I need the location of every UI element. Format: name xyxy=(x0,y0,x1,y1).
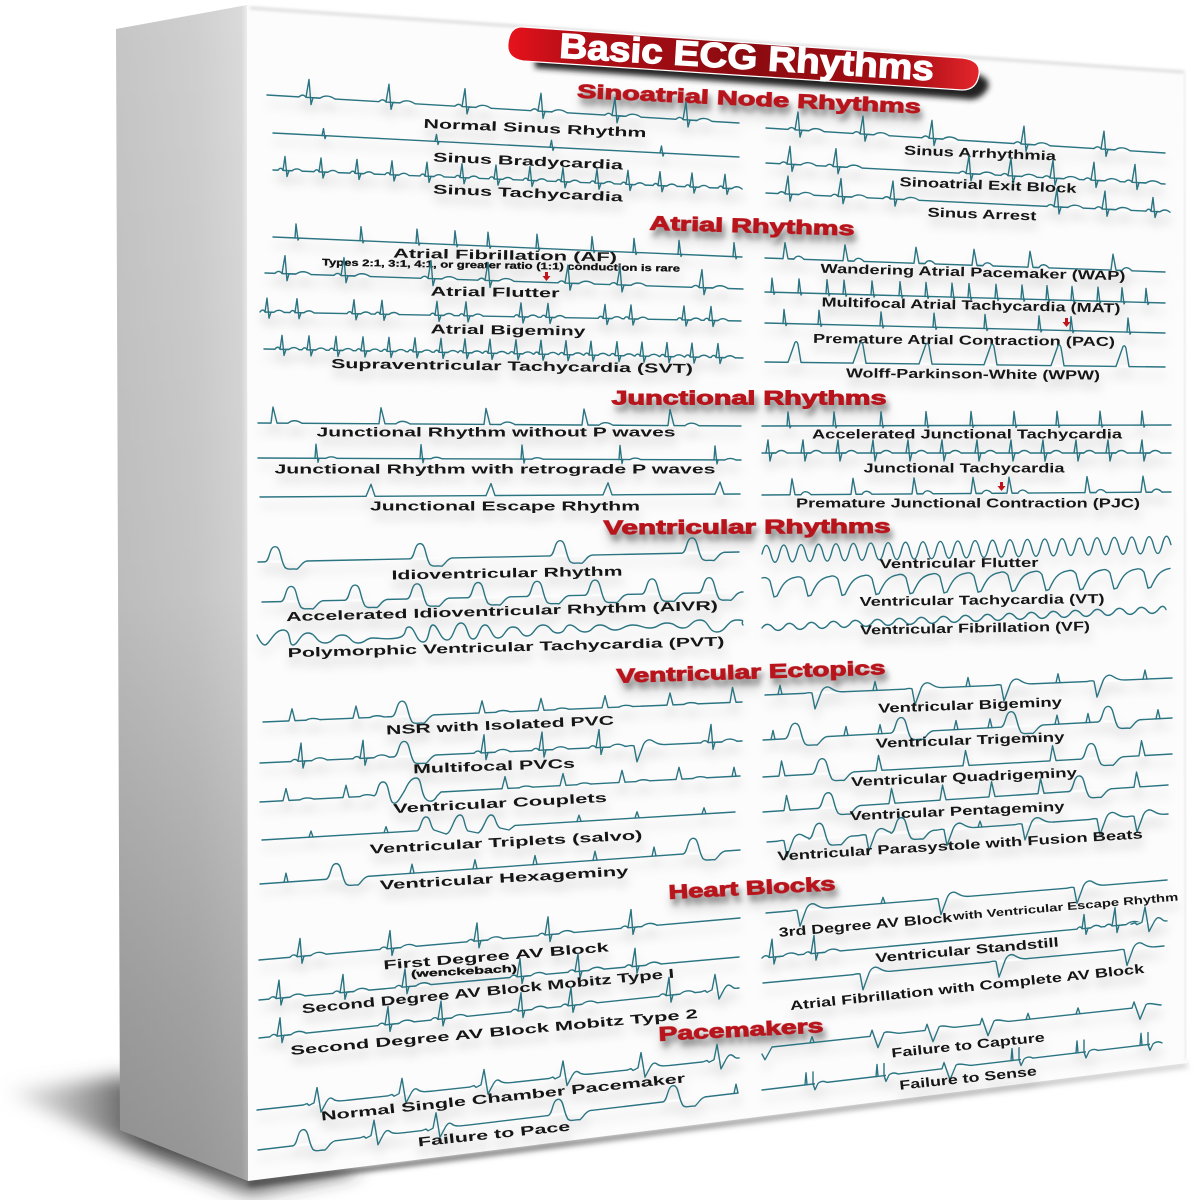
bottom edge shadow xyxy=(248,1065,1187,1184)
trace: junctional rhythm with retrograde p waves xyxy=(258,444,741,464)
front face xyxy=(247,5,1187,1181)
trace: ventricular parasystole xyxy=(767,799,1168,858)
trace: sinoatrial exit block xyxy=(766,145,1165,191)
label: second degree mobitz type 2: Second Degree AV Block Mobitz Type 2 xyxy=(290,1006,698,1058)
label: failure to sense: Failure to Sense xyxy=(899,1063,1037,1093)
label: failure to capture: Failure to Capture xyxy=(891,1029,1045,1061)
trace: idioventricular rhythm xyxy=(258,537,739,570)
label: ventricular quadrigeminy: Ventricular Quadrigeminy xyxy=(851,765,1078,789)
heading: ventricular ectopics: Ventricular Ectopics xyxy=(616,658,886,688)
heading: atrial rhythms: Atrial Rhythms xyxy=(649,214,855,240)
label: sinoatrial exit block: Sinoatrial Exit Block xyxy=(899,174,1078,196)
label: premature atrial contraction: Premature Atrial Contraction (PAC) xyxy=(813,331,1115,349)
front right edge shading xyxy=(1184,72,1186,1060)
label: wandering atrial pacemaker: Wandering Atrial Pacemaker (WAP) xyxy=(820,261,1126,283)
arrow: atrial flutter marker xyxy=(542,272,550,281)
label: junctional tachycardia: Junctional Tachycardia xyxy=(864,460,1066,476)
label: ventricular bigeminy: Ventricular Bigeminy xyxy=(878,694,1063,716)
label: ventricular fibrillation: Ventricular Fibrillation (VF) xyxy=(860,618,1090,638)
label: ventricular parasystole with fusion beats: Ventricular Parasystole with Fusion Beats xyxy=(777,826,1143,864)
trace: atrial fibrillation with complete AV block xyxy=(763,941,1164,999)
label: multifocal PVCs: Multifocal PVCs xyxy=(413,756,575,776)
heading: sinoatrial node rhythms: Sinoatrial Node Rhythms xyxy=(577,82,921,118)
trace: sinus arrhythmia xyxy=(766,110,1165,160)
label: sinus arrest: Sinus Arrest xyxy=(927,205,1038,223)
heading: junctional rhythms: Junctional Rhythms xyxy=(612,388,886,410)
trace: junctional rhythm without p waves xyxy=(258,407,741,426)
label: ventricular standstill: Ventricular Standstill xyxy=(875,935,1059,965)
trace: third degree AV block xyxy=(766,874,1167,929)
trace: supraventricular tachycardia xyxy=(264,335,743,364)
label: supraventricular tachycardia: Supraventricular Tachycardia (SVT) xyxy=(331,356,693,376)
label: idioventricular rhythm: Idioventricular Rhythm xyxy=(391,563,623,583)
label: NSR with isolated PVC: NSR with Isolated PVC xyxy=(386,712,615,737)
label: junctional escape rhythm: Junctional Escape Rhythm xyxy=(370,498,640,514)
trace: sinus tachycardia xyxy=(273,156,742,195)
trace: NSR with isolated PVC xyxy=(263,687,742,730)
label: sinus arrhythmia: Sinus Arrhythmia xyxy=(904,143,1057,163)
front top edge shading xyxy=(250,8,1184,72)
panel: heart blocks xyxy=(259,874,1179,1058)
label: ventricular couplets: Ventricular Couplets xyxy=(393,790,607,816)
panel: sinoatrial node rhythms xyxy=(267,77,1170,223)
trace: second degree mobitz type 2 xyxy=(259,970,739,1047)
heading: ventricular rhythms: Ventricular Rhythms xyxy=(603,517,891,539)
label: failure to pace: Failure to Pace xyxy=(417,1119,571,1149)
label: atrial fibrillation with complete AV block: Atrial Fibrillation with Complete AV Block xyxy=(789,961,1146,1013)
label: ventricular hexageminy: Ventricular Hexageminy xyxy=(379,863,630,893)
trace: ventricular flutter xyxy=(762,536,1171,562)
left side face xyxy=(116,5,248,1181)
trace: ventricular hexageminy xyxy=(260,835,740,892)
label: sinus tachycardia: Sinus Tachycardia xyxy=(433,182,625,205)
trace: ventricular standstill xyxy=(762,903,1167,967)
trace: accelerated idioventricular rhythm xyxy=(262,577,743,610)
trace: failure to pace xyxy=(258,1077,738,1159)
trace: sinus arrest xyxy=(766,175,1170,219)
label: third degree AV block with ventricular escape rhythm xyxy=(778,890,1179,940)
trace: ventricular trigeminy xyxy=(763,703,1172,748)
trace: multifocal PVCs xyxy=(260,723,742,779)
trace: ventricular fibrillation xyxy=(762,606,1166,630)
label: third degree AV block with ventricular escape rhythm: 3rd Degree AV Block xyxy=(778,910,954,940)
label: accelerated idioventricular rhythm: Accelerated Idioventricular Rhythm (AIVR) xyxy=(286,598,718,624)
label: ventricular trigeminy: Ventricular Trigeminy xyxy=(875,729,1066,751)
trace: ventricular bigeminy xyxy=(765,669,1172,711)
trace: multifocal atrial tachycardia xyxy=(765,278,1165,305)
heading: pacemakers: Pacemakers xyxy=(658,1016,824,1046)
label: wolff-parkinson-white: Wolff-Parkinson-White (WPW) xyxy=(846,365,1100,383)
label: ventricular pentageminy: Ventricular Pentageminy xyxy=(849,799,1066,823)
label: normal sinus rhythm: Normal Sinus Rhythm xyxy=(423,116,647,140)
banner pill xyxy=(508,27,979,90)
label: third degree AV block with ventricular escape rhythm: with Ventricular Escape Rhythm xyxy=(951,891,1179,923)
banner shadow xyxy=(535,42,989,100)
panel: ventricular rhythms xyxy=(257,517,1171,660)
label: accelerated junctional tachycardia: Accelerated Junctional Tachycardia xyxy=(812,426,1123,442)
arrow: PAC marker xyxy=(1062,318,1070,327)
trace: junctional escape rhythm xyxy=(260,482,740,497)
trace: ventricular tachycardia xyxy=(762,568,1170,597)
trace: atrial bigeminy xyxy=(260,298,741,327)
title banner xyxy=(508,27,989,100)
trace: ventricular quadrigeminy xyxy=(763,739,1172,785)
label: ventricular flutter: Ventricular Flutter xyxy=(879,555,1039,571)
label: polymorphic ventricular tachycardia: Polymorphic Ventricular Tachycardia (PVT) xyxy=(287,634,725,660)
left face lighting xyxy=(116,5,248,1181)
trace: wandering atrial pacemaker xyxy=(765,242,1165,272)
label: normal single chamber pacemaker: Normal Single Chamber Pacemaker xyxy=(320,1070,686,1124)
label: junctional rhythm without p waves: Junctional Rhythm without P waves xyxy=(316,424,676,440)
trace: wolff-parkinson-white xyxy=(765,341,1165,367)
trace: ventricular triplets xyxy=(262,808,735,840)
trace: sinus bradycardia xyxy=(273,126,739,160)
panel: ventricular ectopics xyxy=(260,658,1172,893)
panel: junctional rhythms xyxy=(258,388,1171,514)
floor shadow xyxy=(6,1076,360,1194)
trace: junctional tachycardia xyxy=(762,440,1171,461)
title: Basic ECG Rhythms xyxy=(558,27,935,88)
trace: premature junctional contraction xyxy=(762,476,1171,495)
heading: heart blocks: Heart Blocks xyxy=(668,874,836,904)
trace: polymorphic ventricular tachycardia xyxy=(257,620,743,645)
panel: atrial rhythms xyxy=(260,214,1165,383)
trace: premature atrial contraction xyxy=(765,309,1165,335)
label: atrial flutter: Atrial Flutter xyxy=(430,284,560,300)
label: multifocal atrial tachycardia: Multifocal Atrial Tachycardia (MAT) xyxy=(821,294,1121,316)
trace: second degree mobitz type 1 xyxy=(259,939,739,1007)
panel: pacemakers xyxy=(257,999,1162,1159)
trace: accelerated junctional tachycardia xyxy=(762,411,1171,428)
arrow: PJC marker xyxy=(998,482,1006,491)
trace: ventricular pentageminy xyxy=(763,770,1168,820)
trace: normal sinus rhythm xyxy=(267,77,739,130)
label: second degree mobitz type 1: Second Degree AV Block Mobitz Type I xyxy=(301,966,675,1016)
trace: normal single chamber pacemaker xyxy=(257,1042,739,1119)
label: ventricular triplets: Ventricular Triplets (salvo) xyxy=(369,827,643,857)
trace: ventricular couplets xyxy=(260,764,740,803)
label: premature junctional contraction: Premature Junctional Contraction (PJC) xyxy=(796,496,1140,510)
label: first degree AV block: First Degree AV Block xyxy=(383,939,611,973)
label: ventricular tachycardia: Ventricular Tachycardia (VT) xyxy=(859,591,1105,609)
trace: failure to sense xyxy=(762,1031,1162,1102)
label: atrial bigeminy: Atrial Bigeminy xyxy=(430,321,587,339)
trace: atrial flutter xyxy=(265,255,743,296)
label: atrial fibrillation: Atrial Fibrillation (AF) xyxy=(393,246,617,264)
label: junctional rhythm with retrograde p waves: Junctional Rhythm with retrograde P waves xyxy=(274,462,716,476)
trace: atrial fibrillation xyxy=(273,223,742,259)
note: wenckebach: (wenckebach) xyxy=(411,964,517,980)
note: flutter conduction types: Types 2:1, 3:1, 4:1, or greater ratio (1:1) conduction is rare xyxy=(322,257,680,275)
label: sinus bradycardia: Sinus Bradycardia xyxy=(433,150,625,173)
trace: failure to capture xyxy=(762,999,1161,1060)
trace: first degree AV block xyxy=(259,900,740,967)
